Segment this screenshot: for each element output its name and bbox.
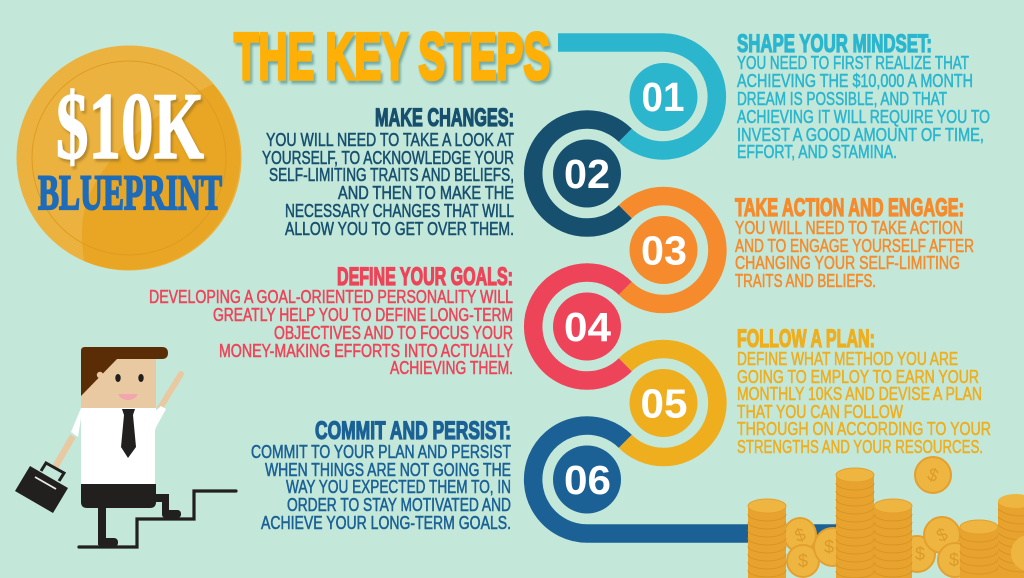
text block: shape your mindset bbox=[737, 31, 990, 162]
coin stack 5 bbox=[998, 494, 1024, 578]
text block: shape your mindset: DREAM IS POSSIBLE, AND THAT bbox=[737, 89, 947, 109]
ear, eyes and mouth bbox=[97, 372, 144, 400]
text block: follow a plan: DEFINE WHAT METHOD YOU ARE bbox=[737, 349, 958, 369]
text block: commit and persist: COMMIT TO YOUR PLAN AND PERSIST bbox=[251, 442, 511, 462]
text block: make changes: YOURSELF, TO ACKNOWLEDGE YOUR bbox=[262, 148, 514, 168]
loose coin bbox=[924, 517, 960, 553]
loose coin: $ bbox=[915, 544, 925, 564]
text block: commit and persist: COMMIT AND PERSIST: bbox=[315, 418, 511, 445]
text block: make changes: NECESSARY CHANGES THAT WILL bbox=[285, 201, 514, 221]
text block: shape your mindset: ACHIEVING THE $10,000 A MONTH bbox=[737, 71, 973, 91]
text block: define your goals: OBJECTIVES AND TO FOCUS YOUR bbox=[274, 323, 513, 343]
text block: make changes: MAKE CHANGES: bbox=[375, 105, 514, 132]
right arm bbox=[160, 374, 181, 408]
ring 04 bbox=[533, 273, 625, 381]
coin stack 4 bbox=[960, 520, 998, 578]
coin stack 3 bbox=[874, 499, 912, 578]
loose coin at right edge bbox=[1011, 536, 1024, 570]
badge: $10K blueprint coin: $10K bbox=[56, 73, 204, 179]
falling coin: $ bbox=[925, 464, 941, 486]
text block: commit and persist bbox=[251, 418, 511, 533]
number badge 05 bbox=[630, 369, 698, 437]
number badge 06: 06 bbox=[564, 457, 611, 503]
text block: follow a plan: FOLLOW A PLAN: bbox=[737, 326, 875, 353]
text block: make changes: AND THEN TO MAKE THE bbox=[338, 183, 514, 203]
text block: make changes bbox=[262, 105, 514, 239]
text block: commit and persist: WAY YOU EXPECTED THEM TO, IN bbox=[286, 477, 511, 497]
timeline path: six linked rings bbox=[533, 42, 845, 534]
ring 03 bbox=[625, 196, 717, 304]
loose coin bbox=[899, 536, 935, 572]
text block: commit and persist: WHEN THINGS ARE NOT GOING THE bbox=[265, 460, 511, 480]
head bbox=[81, 347, 156, 408]
title: THE KEY STEPS bbox=[234, 19, 550, 93]
text block: define your goals: MONEY-MAKING EFFORTS INTO ACTUALLY bbox=[219, 341, 513, 361]
text block: define your goals: DEVELOPING A GOAL-ORIENTED PERSONALITY WILL bbox=[149, 287, 513, 307]
text block: define your goals: GREATLY HELP YOU TO DEFINE LONG-TERM bbox=[213, 305, 513, 325]
title: THE KEY STEPS bbox=[236, 22, 552, 96]
illustration: businessman climbing stairs bbox=[15, 347, 236, 547]
number badge 03 bbox=[630, 216, 698, 284]
text block: follow a plan bbox=[737, 326, 991, 457]
number badge 04 bbox=[553, 292, 621, 360]
tie bbox=[121, 409, 136, 458]
loose coin: $ bbox=[792, 524, 808, 546]
number badge 02: 02 bbox=[564, 151, 610, 197]
coin stack 2 bbox=[836, 468, 874, 578]
number badge 03: 03 bbox=[641, 228, 687, 274]
text block: make changes: SELF-LIMITING TRAITS AND BELIEFS, bbox=[269, 165, 514, 185]
text block: shape your mindset: EFFORT, AND STAMINA. bbox=[737, 142, 897, 162]
ring 02 bbox=[533, 120, 625, 228]
badge: $10K blueprint coin: BLUEPRINT bbox=[38, 164, 222, 220]
badge: $10K blueprint coin bbox=[16, 46, 242, 270]
shorts bbox=[81, 484, 156, 508]
ring 01 with top bar bbox=[558, 42, 717, 150]
loose coin: $ bbox=[798, 551, 808, 571]
text block: make changes: YOU WILL NEED TO TAKE A LOOK AT bbox=[266, 130, 514, 150]
badge: $10K blueprint coin: $10K bbox=[58, 76, 206, 182]
text block: take action and engage: YOU WILL NEED TO TAKE ACTION bbox=[735, 218, 963, 238]
loose coin bbox=[787, 545, 819, 577]
ring 06 with bottom bar bbox=[533, 426, 845, 534]
left arm bbox=[54, 436, 73, 469]
loose coin: $ bbox=[824, 537, 834, 557]
number badge 01 bbox=[630, 63, 698, 131]
text block: define your goals bbox=[149, 264, 513, 378]
shirt bbox=[71, 408, 156, 484]
text block: take action and engage: TRAITS AND BELIEFS. bbox=[735, 271, 876, 291]
illustration: gold coins and stacks bbox=[748, 457, 1024, 578]
text block: define your goals: ACHIEVING THEM. bbox=[390, 358, 513, 378]
number badge 05: 05 bbox=[640, 380, 688, 426]
number badge 02 bbox=[553, 140, 621, 208]
title bbox=[234, 19, 552, 96]
number badge 06 bbox=[553, 446, 621, 514]
ring 05 bbox=[625, 349, 717, 457]
loose coin bbox=[938, 543, 972, 577]
loose coin bbox=[814, 528, 852, 566]
loose coin: $ bbox=[949, 550, 959, 570]
text block: take action and engage bbox=[735, 195, 974, 291]
number badge 04: 04 bbox=[564, 304, 611, 350]
text block: follow a plan: THAT YOU CAN FOLLOW bbox=[737, 402, 903, 422]
coin stack 1 bbox=[748, 499, 786, 578]
text block: make changes: ALLOW YOU TO GET OVER THEM. bbox=[285, 219, 514, 239]
stairs bbox=[79, 491, 236, 547]
legs and feet bbox=[98, 494, 181, 547]
hair bbox=[81, 347, 168, 396]
text block: commit and persist: ACHIEVE YOUR LONG-TERM GOALS. bbox=[261, 513, 511, 533]
falling coin bbox=[915, 457, 951, 493]
loose coin: $ bbox=[933, 524, 951, 546]
text block: define your goals: DEFINE YOUR GOALS: bbox=[337, 264, 513, 291]
text block: commit and persist: ORDER TO STAY MOTIVATED AND bbox=[287, 495, 511, 515]
loose coin bbox=[784, 518, 816, 552]
text block: shape your mindset: SHAPE YOUR MINDSET: bbox=[737, 31, 932, 58]
number badge 01: 01 bbox=[642, 74, 684, 120]
briefcase bbox=[15, 463, 68, 513]
text block: take action and engage: CHANGING YOUR SELF-LIMITING bbox=[735, 253, 960, 273]
